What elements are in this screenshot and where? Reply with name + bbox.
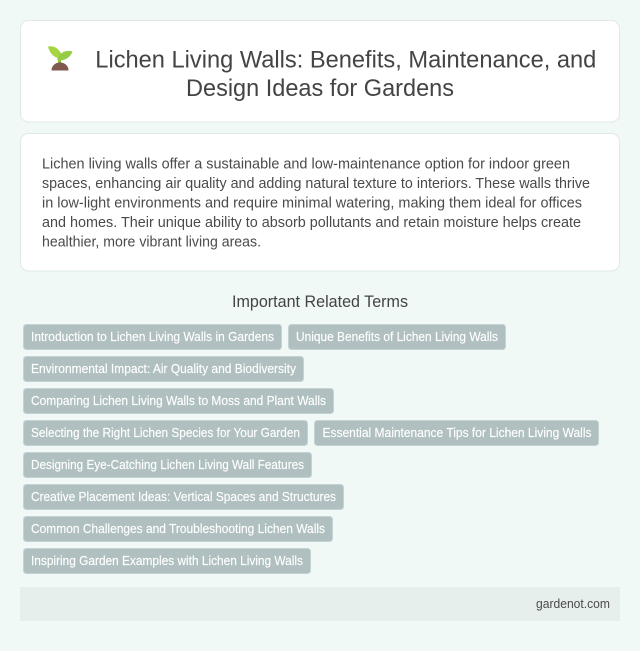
text block: introduction paragraph: and homes. Their unique ability to absorb pollutants and retain moisture helps create — [42, 214, 581, 231]
heading: important related terms: Important Related Terms — [232, 293, 408, 311]
tag: maintenance tips — [314, 420, 598, 446]
tag: common challenges: Common Challenges and Troubleshooting Lichen Walls — [31, 522, 325, 536]
tag: environmental impact — [24, 356, 304, 382]
tag: creative placement — [24, 484, 344, 510]
panel: title card — [20, 20, 620, 122]
tag: unique benefits — [288, 324, 506, 350]
tag: environmental impact: Environmental Impact: Air Quality and Biodiversity — [31, 362, 297, 376]
tags: related terms — [24, 324, 598, 574]
tag: inspiring examples: Inspiring Garden Examples with Lichen Living Walls — [31, 554, 303, 568]
heading: title — [95, 46, 596, 102]
tag: common challenges — [24, 516, 332, 542]
tag: introduction: Introduction to Lichen Living Walls in Gardens — [31, 330, 274, 344]
tag: creative placement: Creative Placement Ideas: Vertical Spaces and Structures — [31, 490, 336, 504]
footer: site name: gardenot.com — [536, 596, 610, 611]
tag: comparing — [24, 388, 334, 414]
text block: introduction paragraph: in low-light environments and require minimal watering, making them ideal for offices — [42, 194, 582, 211]
text block: introduction paragraph: Lichen living walls offer a sustainable and low-maintenance option for indoor green — [42, 155, 570, 172]
text block: introduction paragraph: healthier, more vibrant living areas. — [42, 233, 261, 250]
icon: sprout — [48, 46, 72, 70]
tag: maintenance tips: Essential Maintenance Tips for Lichen Living Walls — [322, 426, 592, 440]
tag: unique benefits: Unique Benefits of Lichen Living Walls — [296, 330, 498, 344]
tag: designing features — [24, 452, 312, 478]
panel: introduction — [20, 134, 620, 271]
tag: inspiring examples — [24, 548, 310, 574]
text block: introduction paragraph — [42, 155, 590, 250]
text block: introduction paragraph: spaces, enhancing air quality and adding natural texture to interiors. These walls thrive — [42, 175, 590, 192]
tag: introduction — [24, 324, 282, 350]
heading: title: Design Ideas for Gardens — [186, 75, 454, 102]
tag: comparing: Comparing Lichen Living Walls to Moss and Plant Walls — [31, 394, 326, 408]
tag: selecting species: Selecting the Right Lichen Species for Your Garden — [31, 426, 300, 440]
footer — [20, 587, 620, 621]
heading: title: Lichen Living Walls: Benefits, Maintenance, and — [95, 46, 596, 73]
tag: designing features: Designing Eye-Catching Lichen Living Wall Features — [31, 458, 304, 472]
tag: selecting species — [24, 420, 308, 446]
